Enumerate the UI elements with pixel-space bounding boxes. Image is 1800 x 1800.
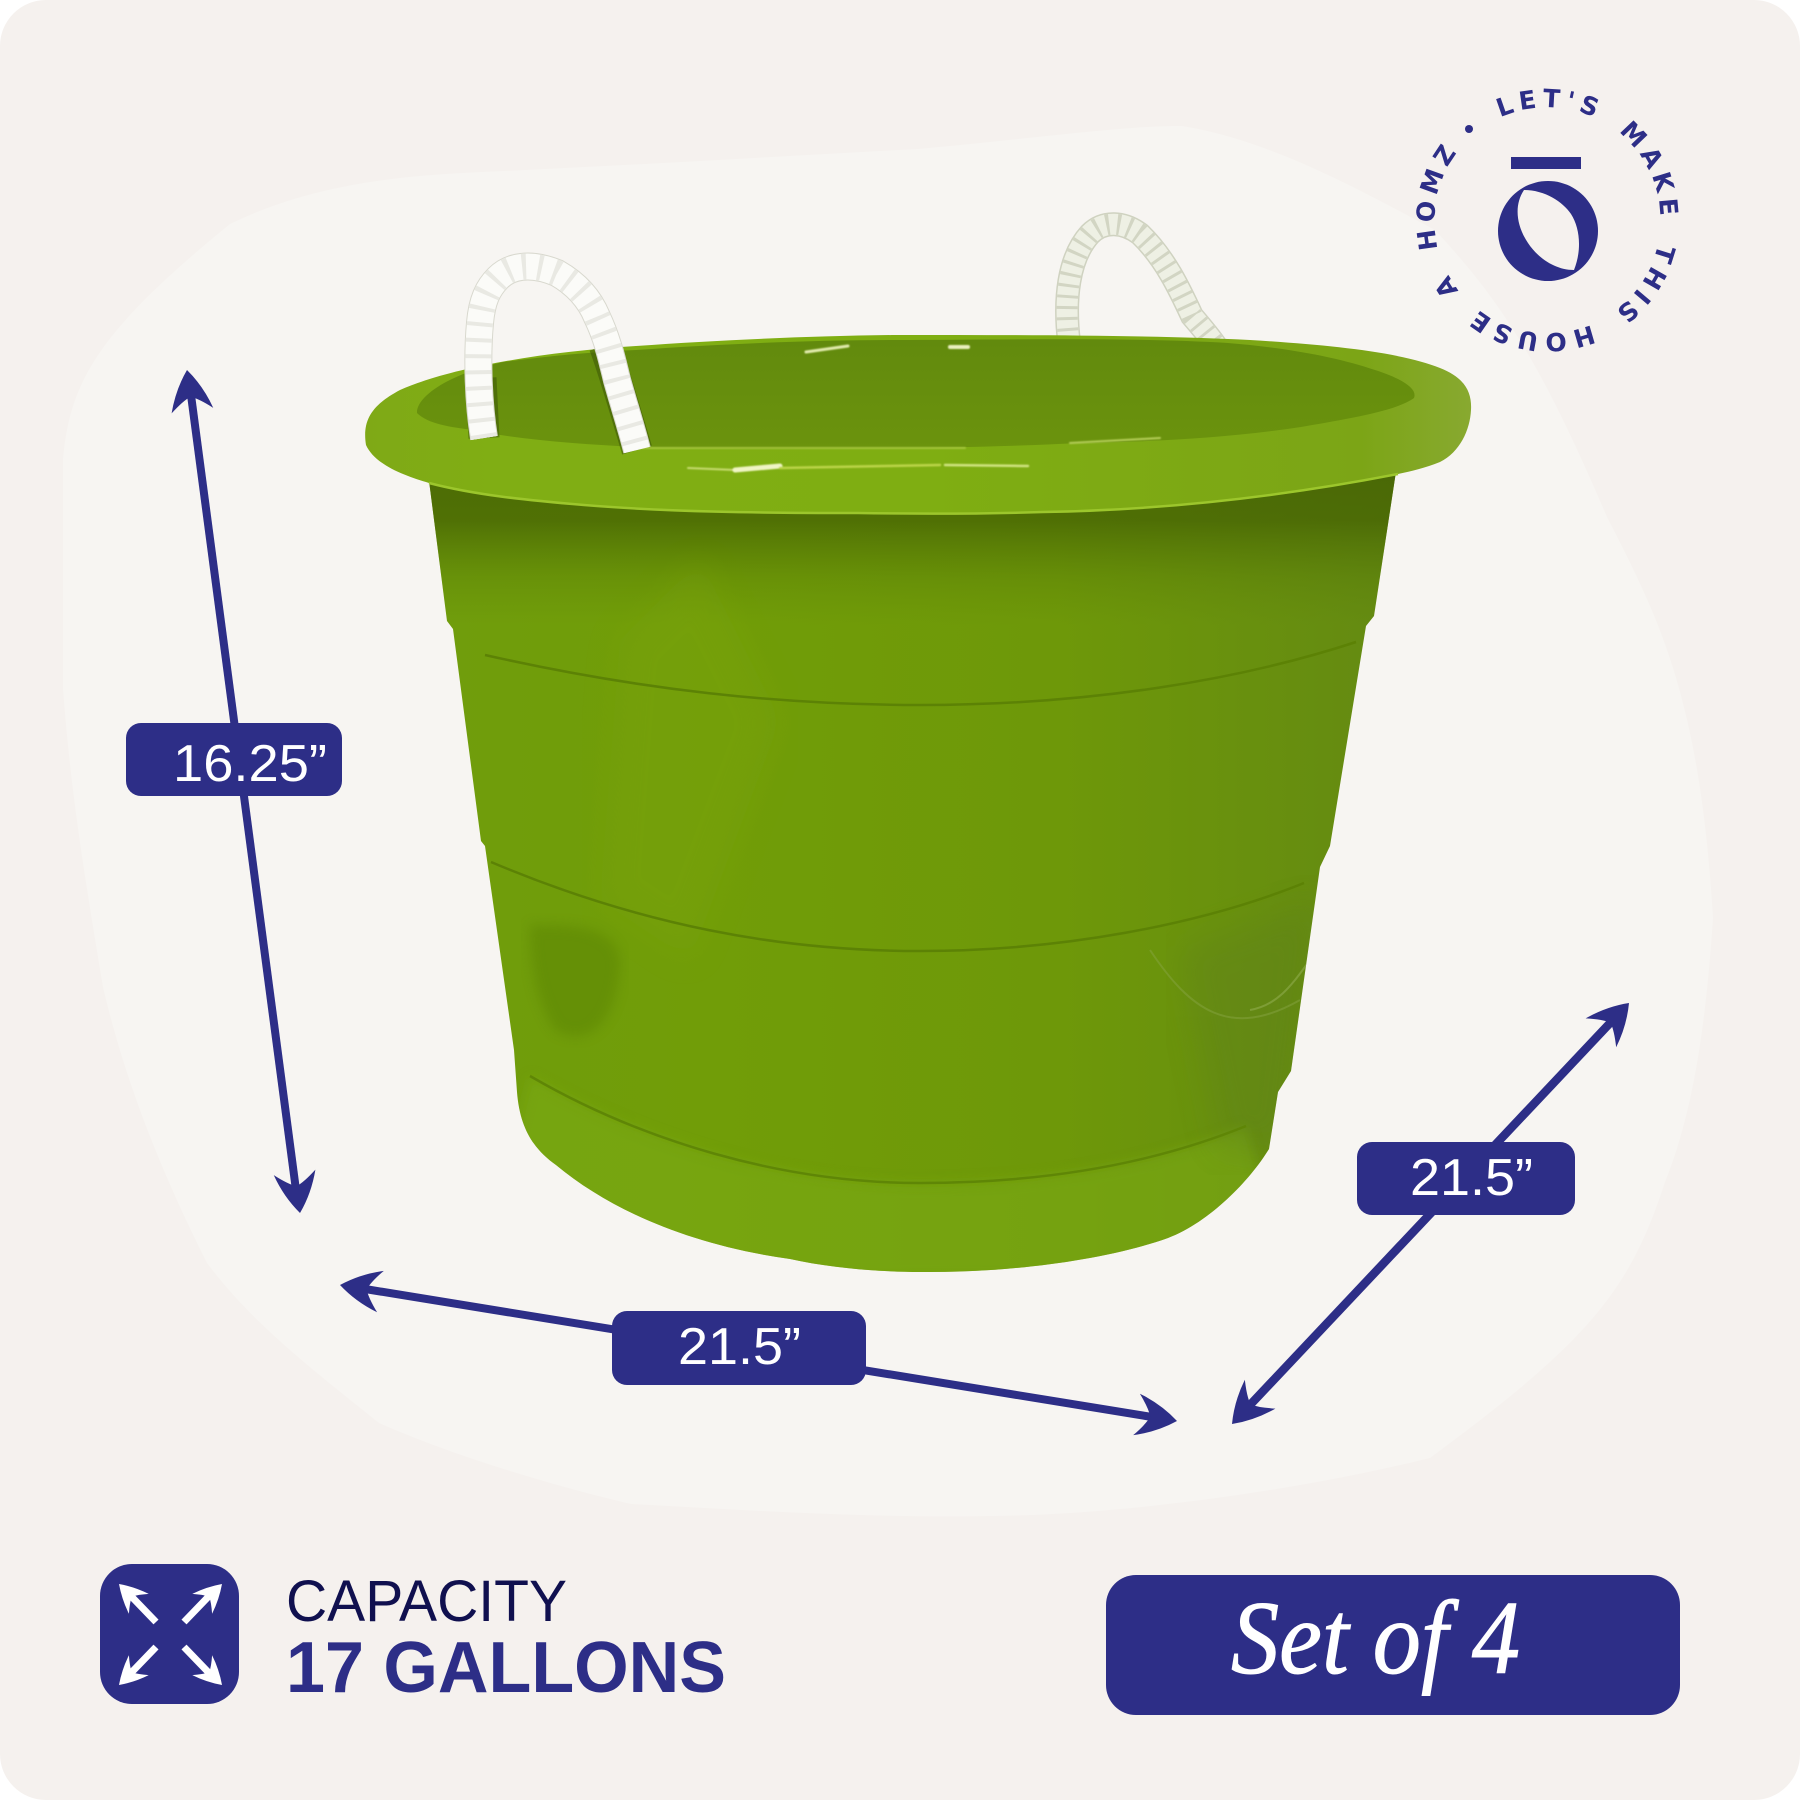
arrow: width dimension [337, 1264, 1180, 1442]
brand badge [1416, 88, 1678, 352]
set of 4 badge [1106, 1575, 1680, 1715]
tub rim [365, 335, 1471, 514]
rim bottom edge highlight [429, 474, 1398, 514]
body shading and ribs [420, 465, 1410, 1280]
arrow: height dimension [166, 367, 321, 1216]
label: width 21.5: 21.5” [678, 1318, 801, 1376]
soft background blob [63, 126, 1713, 1516]
slogan dot [1465, 125, 1473, 133]
arrow: depth dimension [1217, 989, 1644, 1438]
logo bar [1511, 157, 1581, 169]
tub interior [417, 339, 1415, 449]
label: height 16.25 [126, 723, 342, 796]
rim gloss highlights [640, 346, 1160, 470]
label: depth 21.5 [1357, 1142, 1575, 1215]
rope handle: back right [1067, 224, 1216, 346]
tub body [427, 465, 1397, 1272]
icon: expand arrows [100, 1564, 239, 1704]
set of 4 badge: Set of 4 [1231, 1579, 1520, 1696]
circular slogan: LET'S MAKE THIS HOUSE A HOMZ [1416, 88, 1678, 352]
rope handle: front left [478, 267, 637, 450]
capacity label: CAPACITY [286, 1569, 567, 1634]
label: height 16.25: 16.25” [173, 735, 327, 793]
green tub [365, 224, 1471, 1280]
label: width 21.5 [612, 1311, 866, 1385]
capacity value: 17 GALLONS [286, 1628, 726, 1708]
label: depth 21.5: 21.5” [1410, 1149, 1533, 1207]
logo ring [1498, 181, 1598, 281]
